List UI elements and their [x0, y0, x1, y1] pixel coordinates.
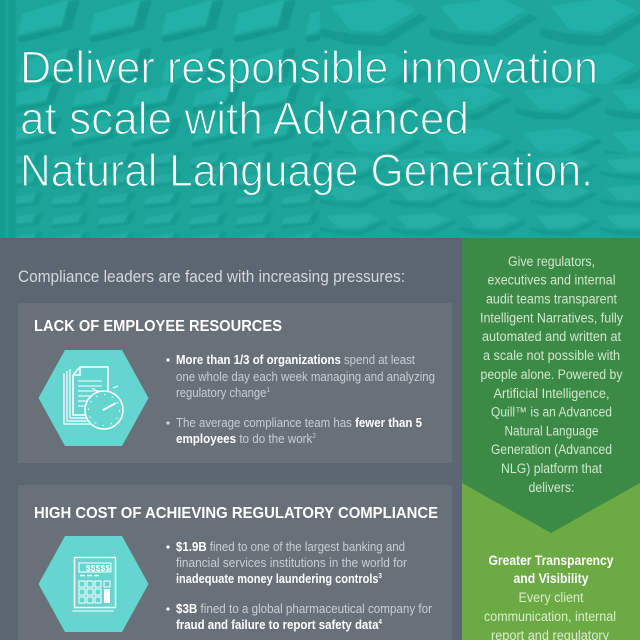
bullets: high cost: 3	[379, 573, 382, 580]
bullets: lack of employee resources: one whole day each week managing and analyzing	[176, 370, 435, 384]
bullets: high cost: $3B fined to a global pharmaceutical company for	[176, 602, 432, 616]
panel: high cost of achieving regulatory compliance	[18, 485, 452, 640]
description text: delivers:	[528, 480, 574, 495]
icon: document stack and stopwatch	[38, 350, 148, 446]
greater transparency text: communication, internal	[484, 609, 616, 624]
greater transparency text: and Visibility	[514, 571, 589, 586]
greater transparency text: Every client	[518, 590, 584, 605]
intro line: Compliance leaders are faced with increasing pressures:	[18, 268, 405, 286]
bullets: lack of employee resources: More than 1/3 of organizations spend at least	[176, 353, 415, 367]
icon: calculator: $$$$$	[86, 564, 111, 573]
description text: Quill™ is an Advanced	[491, 404, 612, 420]
icon: calculator	[38, 536, 148, 632]
bullets: high cost	[166, 540, 432, 632]
bullets: high cost: $1.9B fined to one of the largest banking and	[176, 540, 405, 554]
greater transparency text: Greater Transparency	[488, 553, 614, 568]
description text: a scale not possible with	[483, 348, 620, 363]
description text: NLG) platform that	[501, 461, 602, 476]
description text: Generation (Advanced	[491, 442, 612, 457]
description text: audit teams transparent	[486, 292, 617, 306]
description text: Artificial Intelligence,	[494, 386, 610, 401]
title	[20, 42, 598, 196]
bullets: lack of employee resources: 2	[312, 433, 316, 440]
heading: high cost: HIGH COST OF ACHIEVING REGULATORY COMPLIANCE	[34, 505, 438, 522]
heading: lack of employee resources: LACK OF EMPLOYEE RESOURCES	[34, 318, 282, 335]
bullets: lack of employee resources: The average compliance team has fewer than 5	[176, 416, 422, 430]
left panel background	[0, 238, 462, 640]
description text: Natural Language	[504, 424, 598, 438]
bullets: lack of employee resources	[166, 353, 435, 446]
bullets: high cost: fraud and failure to report safety data	[176, 618, 398, 632]
description text: automated and written at	[482, 329, 621, 344]
title: Deliver responsible innovation	[20, 42, 598, 93]
header background: teal architectural grid	[0, 0, 640, 248]
bullets: lack of employee resources: regulatory change	[176, 386, 276, 400]
title: Natural Language Generation.	[20, 145, 593, 196]
description text	[480, 254, 623, 495]
bullets: high cost: 4	[378, 619, 382, 626]
bullets: high cost: inadequate money laundering controls	[176, 572, 406, 586]
bullets: lack of employee resources: 1	[266, 387, 270, 394]
greater transparency text	[484, 553, 616, 640]
bullets: high cost: financial services institutions in the world for	[176, 556, 407, 570]
panel: dark green description	[462, 238, 640, 533]
panel: light green lower column	[462, 238, 640, 640]
title: at scale with Advanced	[20, 93, 469, 144]
description text: executives and internal	[488, 272, 616, 288]
description text: people alone. Powered by	[480, 367, 623, 382]
description text: Intelligent Narratives, fully	[480, 310, 623, 326]
bullets: lack of employee resources: employees to do the work	[176, 432, 318, 446]
description text: Give regulators,	[508, 254, 595, 269]
panel: lack of employee resources	[18, 303, 452, 463]
